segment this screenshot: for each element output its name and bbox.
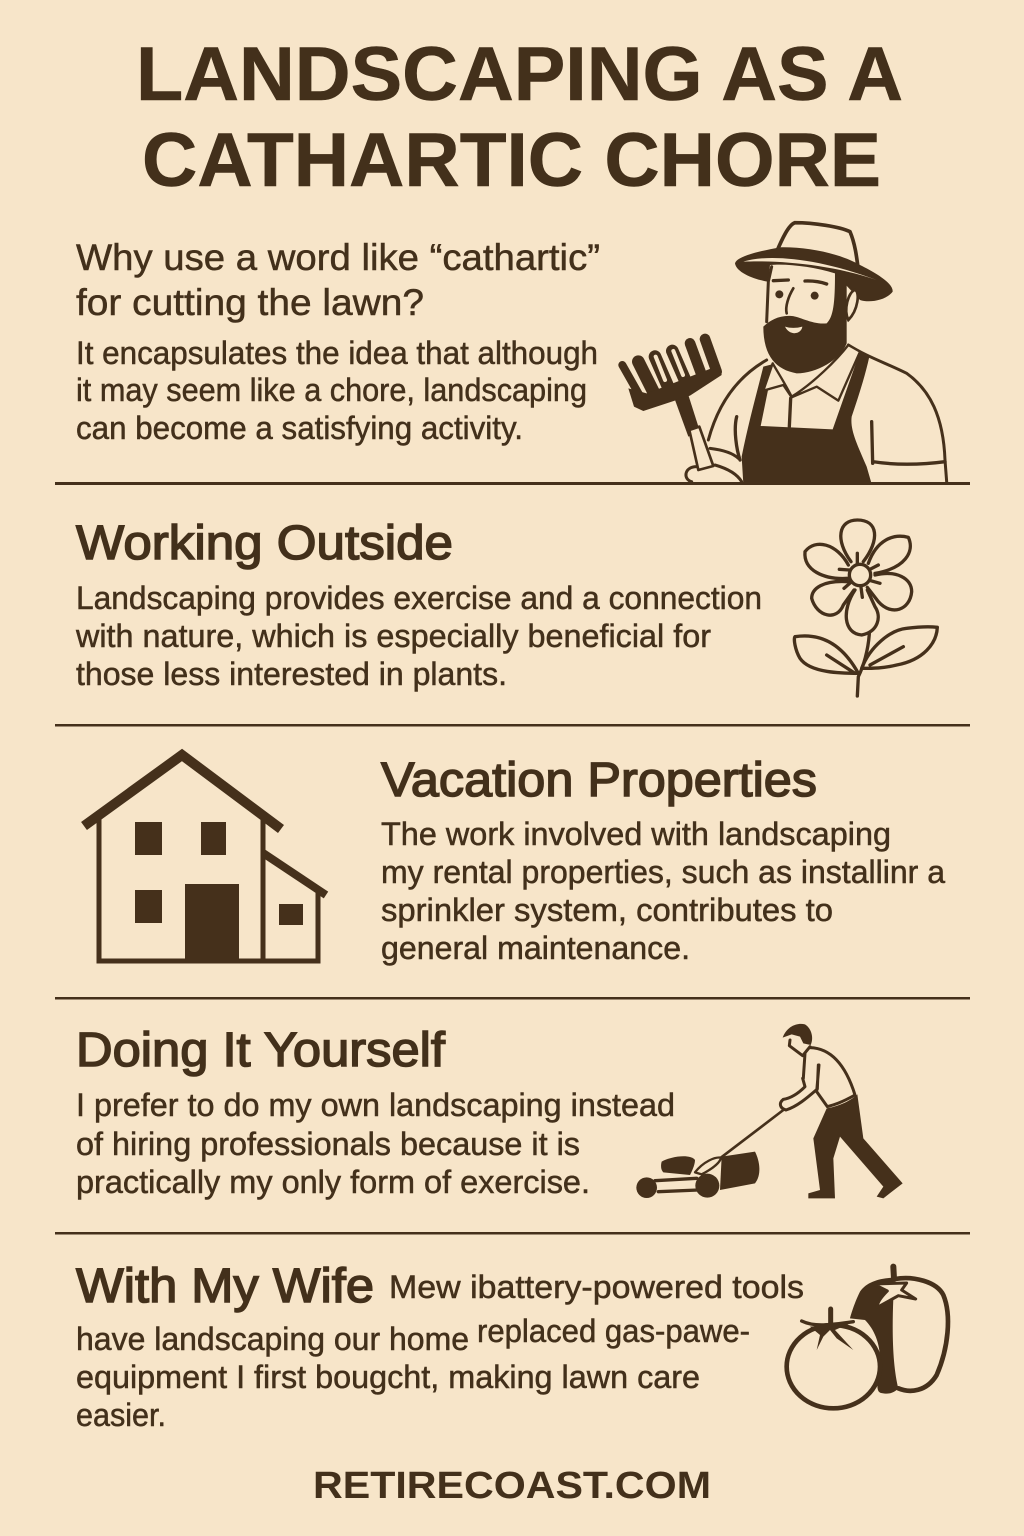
text: vacation properties: sprinkler system, contributes to bbox=[381, 892, 833, 928]
text: with my wife: Mew ibattery-powered tools bbox=[389, 1269, 804, 1305]
text: with my wife: equipment I first bougcht, making lawn care bbox=[76, 1359, 700, 1395]
icon: bearded gardener with rake bbox=[622, 223, 947, 484]
text: with my wife: have landscaping our home bbox=[76, 1321, 469, 1357]
title bbox=[136, 32, 903, 203]
intro text block: It encapsulates the idea that although bbox=[76, 335, 598, 371]
title: LANDSCAPING AS A bbox=[136, 32, 903, 117]
text: doing it yourself bbox=[76, 1087, 675, 1200]
panel: doing it yourself bbox=[76, 1024, 903, 1200]
text: doing it yourself: of hiring professionals because it is bbox=[76, 1126, 580, 1162]
text: with my wife bbox=[76, 1269, 804, 1433]
panel: vacation properties bbox=[84, 754, 945, 966]
intro question heading bbox=[76, 237, 600, 323]
panel: working outside bbox=[75, 517, 937, 696]
text: working outside: Landscaping provides exercise and a connection bbox=[76, 580, 762, 616]
intro question heading: Why use a word like “cathartic” bbox=[76, 237, 600, 278]
divider bbox=[55, 997, 970, 1000]
text: working outside bbox=[75, 580, 762, 692]
heading: with my wife: With My Wife bbox=[76, 1260, 374, 1313]
intro text block: can become a satisfying activity. bbox=[76, 410, 523, 446]
intro text block bbox=[76, 335, 598, 446]
text: with my wife: easier. bbox=[76, 1397, 166, 1433]
text: vacation properties bbox=[381, 816, 945, 966]
text: vacation properties: my rental properties, such as installinr a bbox=[381, 854, 945, 890]
rake head bbox=[622, 339, 722, 411]
text: vacation properties: general maintenance. bbox=[381, 930, 690, 966]
text: doing it yourself: practically my only form of exercise. bbox=[76, 1164, 590, 1200]
title: CATHARTIC CHORE bbox=[142, 118, 881, 203]
intro question heading: for cutting the lawn? bbox=[76, 282, 424, 323]
intro text block: it may seem like a chore, landscaping bbox=[76, 372, 587, 408]
divider bbox=[55, 724, 970, 726]
panel: with my wife bbox=[76, 1260, 948, 1433]
text: vacation properties: The work involved with landscaping bbox=[381, 816, 891, 852]
icon: flower bbox=[794, 520, 937, 696]
text: working outside: those less interested in plants. bbox=[76, 656, 507, 692]
text: with my wife: replaced gas-pawe- bbox=[477, 1313, 750, 1349]
divider bbox=[55, 482, 970, 485]
footer website: RETIRECOAST.COM bbox=[313, 1465, 711, 1507]
panel: intro bbox=[76, 223, 947, 484]
heading: vacation properties: Vacation Properties bbox=[381, 754, 817, 807]
icon: person pushing lawn mower bbox=[636, 1024, 903, 1198]
heading: doing it yourself: Doing It Yourself bbox=[76, 1024, 446, 1077]
icon: tomatoes bbox=[787, 1267, 948, 1408]
text: doing it yourself: I prefer to do my own landscaping instead bbox=[76, 1087, 675, 1123]
heading: working outside: Working Outside bbox=[76, 517, 453, 570]
icon: house bbox=[84, 755, 326, 961]
text: working outside: with nature, which is especially beneficial for bbox=[75, 618, 711, 654]
divider bbox=[55, 1232, 970, 1234]
